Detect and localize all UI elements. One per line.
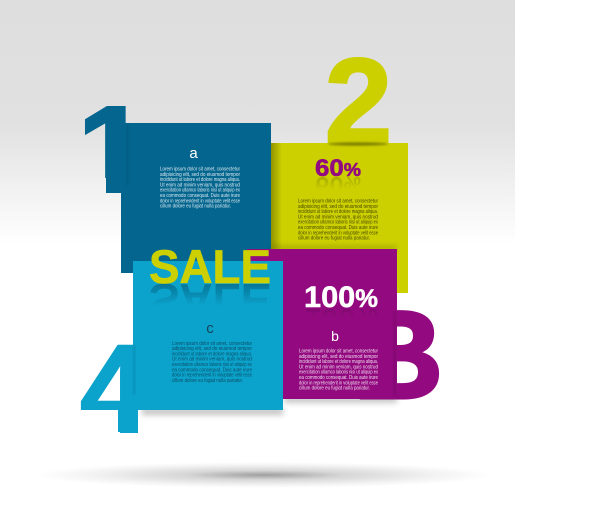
text block: purple panel: exercitation ullamco laboris nisi ut aliquip ex: [299, 370, 378, 376]
fold shadow of numeral 1: [127, 125, 128, 185]
text block: blue panel: adipisicing elit, sed do eiusmod tempor: [160, 172, 240, 178]
numeral 2: 2: [324, 33, 392, 169]
text block: cyan panel: incididunt ut labore et dolore magna aliqua.: [172, 351, 252, 357]
heading: c: c: [206, 320, 214, 337]
text block: blue panel: ea commodo consequat. Duis aute irure: [160, 193, 240, 199]
text block: yellow panel: Ut enim ad minim veniam, quis nostrud: [298, 214, 378, 220]
text block: blue panel: incididunt ut labore et dolore magna aliqua.: [160, 177, 240, 183]
text block: cyan panel: Lorem ipsum dolor sit amet, consectetur: [172, 341, 252, 347]
text block: purple panel: Lorem ipsum dolor sit amet, consectetur: [299, 348, 378, 354]
reflection: SALE: SALE: [149, 274, 271, 327]
text block: yellow panel: ea commodo consequat. Duis aute irure: [298, 225, 378, 231]
panel: dark blue a: [121, 123, 271, 273]
text block: cyan panel: dolor in reprehenderit in voluptate velit esse: [172, 373, 252, 379]
background panel: [0, 0, 515, 250]
numeral 4: 4: [80, 320, 150, 459]
shadow under numeral 2: [328, 142, 388, 146]
label: 100%: 100%: [304, 281, 378, 314]
text block: yellow panel: exercitation ullamco laboris nisi ut aliquip ex: [298, 220, 378, 226]
text block: cyan panel: exercitation ullamco laboris nisi ut aliquip ex: [172, 362, 252, 368]
text block: cyan panel: ea commodo consequat. Duis aute irure: [172, 367, 252, 373]
text block: yellow panel: cillum dolore eu fugiat nulla pariatur.: [298, 236, 370, 242]
panel: purple b: [247, 246, 397, 403]
text block: purple panel: cillum dolore eu fugiat nulla pariatur.: [299, 386, 370, 392]
text block: purple panel: ea commodo consequat. Duis aute irure: [299, 375, 378, 381]
text block: purple panel: [299, 348, 378, 392]
text block: purple panel: dolor in reprehenderit in voluptate velit esse: [299, 380, 378, 386]
reflection: 60%: 60%: [315, 171, 361, 198]
numeral 4 stem over panel edge: [118, 410, 138, 432]
letter B: B: [353, 286, 443, 425]
text block: cyan panel: cillum dolore eu fugiat nulla pariatur.: [172, 378, 243, 384]
text block: blue panel: Lorem ipsum dolor sit amet, consectetur: [160, 166, 240, 172]
text block: yellow panel: Lorem ipsum dolor sit amet, consectetur: [298, 198, 378, 204]
reflection: 100%: 100%: [304, 302, 378, 335]
text block: purple panel: Ut enim ad minim veniam, quis nostrud: [299, 364, 378, 370]
text block: cyan panel: [172, 341, 252, 384]
text block: blue panel: exercitation ullamco laboris nisi ut aliquip ex: [160, 188, 240, 194]
text block: blue panel: [160, 166, 240, 210]
panel: cyan c: [133, 261, 283, 415]
text block: yellow panel: incididunt ut labore et dolore magna aliqua.: [298, 209, 378, 215]
text block: blue panel: dolor in reprehenderit in voluptate velit esse: [160, 198, 240, 204]
text block: cyan panel: Ut enim ad minim veniam, quis nostrud: [172, 357, 252, 363]
fold shadow of numeral 4: [134, 345, 135, 395]
text block: blue panel: cillum dolore eu fugiat nulla pariatur.: [160, 204, 231, 210]
text block: yellow panel: [298, 198, 378, 242]
text block: cyan panel: adipisicing elit, sed do eiusmod tempor: [172, 346, 252, 352]
text block: yellow panel: adipisicing elit, sed do eiusmod tempor: [298, 204, 378, 210]
ground shadow: [36, 462, 492, 488]
title: SALE: SALE: [149, 240, 271, 293]
text block: blue panel: Ut enim ad minim veniam, quis nostrud: [160, 182, 240, 188]
panel: yellow: [271, 142, 408, 293]
fold shadow of letter B: [394, 312, 396, 396]
numeral 1: 1: [75, 81, 149, 220]
text block: yellow panel: dolor in reprehenderit in voluptate velit esse: [298, 230, 378, 236]
text block: purple panel: adipisicing elit, sed do eiusmod tempor: [299, 354, 378, 360]
heading: b: b: [331, 328, 339, 344]
heading: a: a: [189, 145, 198, 162]
label: 60%: 60%: [315, 155, 361, 182]
text block: purple panel: incididunt ut labore et dolore magna aliqua.: [299, 359, 378, 365]
